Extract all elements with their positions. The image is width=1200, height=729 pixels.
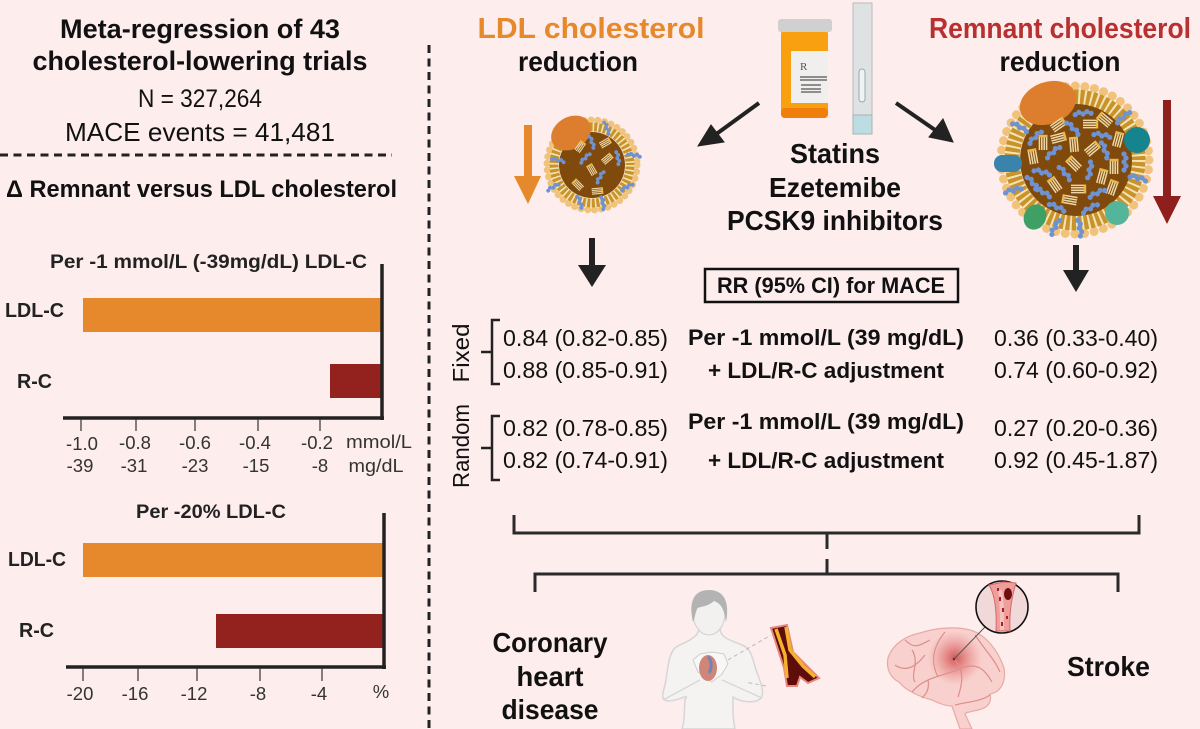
arrowhead: LDL decrease [514,176,541,204]
results: random: Per -1 mmol/L (39 mg/dL) [688,409,964,434]
results: fixed: 0.84 (0.82-0.85) [503,325,668,351]
chart: per -1 mmol/L [5,251,412,476]
title: meta-regression: MACE events = 41,481 [65,117,335,147]
label: coronary heart disease: heart [516,661,584,692]
chart: per -1 mmol/L: -0.2 [301,432,333,453]
title: meta-regression: cholesterol-lowering trials [32,46,368,76]
chart: per -1 mmol/L: -0.6 [179,432,211,453]
arrow: to LDL [698,103,759,146]
arrow: LDL down [578,238,606,287]
chart: per -1 mmol/L: -0.4 [239,432,271,453]
chart: per -1 mmol/L: mg/dL [348,455,404,476]
chart: per -1 mmol/L: LDL-C [5,300,64,322]
chart: per -20%: Per -20% LDL-C [136,501,286,523]
title: meta-regression: N = 327,264 [138,85,262,113]
label: coronary heart disease: Coronary [492,627,608,658]
heading: remnant cholesterol reduction: reduction [1000,46,1120,77]
chart: per -20% [8,501,389,704]
chart: per -20%: -4 [311,683,327,704]
icon: injector pen [853,3,872,134]
chart: per -20%: R-C [19,620,54,642]
icon: brain [887,628,1004,729]
icon: vessel inset [954,581,1028,659]
results: random: 0.82 (0.78-0.85) [503,415,668,441]
title: meta-regression [32,14,368,147]
chart: per -20%: -20 [67,683,93,704]
text: drug list: PCSK9 inhibitors [727,205,943,236]
results: random: 0.82 (0.74-0.91) [503,447,668,473]
heading: LDL cholesterol reduction [478,13,704,77]
chart: per -20%: -12 [181,683,207,704]
chart: per -1 mmol/L: R-C [17,371,52,393]
arrowhead: remnant decrease [1153,196,1181,224]
chart: per -1 mmol/L: -39 [67,455,93,476]
chart: per -20%: -16 [122,683,148,704]
heading: remnant cholesterol reduction [929,13,1191,77]
results: random: 0.27 (0.20-0.36) [994,415,1158,441]
icon: pill bottle: R [800,61,808,73]
results: fixed [448,320,1158,384]
chart: per -1 mmol/L: Per -1 mmol/L (-39mg/dL) LDL-C [50,251,367,273]
chart: per -1 mmol/L: -0.8 [119,432,151,453]
arrow: remnant decrease [1163,100,1171,198]
chart: per -20%: -8 [250,683,266,704]
icon: LDL particle [545,109,642,211]
chart: per -1 mmol/L: -31 [121,455,147,476]
results: fixed: 0.36 (0.33-0.40) [994,325,1158,351]
results: random [448,404,1158,488]
text: drug list: Ezetemibe [769,172,901,203]
text: drug list: Statins [790,138,880,169]
chart: per -1 mmol/L: -8 [312,455,328,476]
results: random: 0.92 (0.45-1.87) [994,447,1158,473]
title: meta-regression: Meta-regression of 43 [60,14,340,44]
results: random: + LDL/R-C adjustment [708,448,945,473]
icon: remnant particle [994,73,1150,239]
label: coronary heart disease: disease [502,694,598,725]
label: stroke: Stroke [1067,651,1150,682]
results: random: Random [448,404,474,488]
chart: per -1 mmol/L: -1.0 [66,433,98,454]
heading: LDL cholesterol reduction: LDL cholesterol [478,13,704,45]
heading: LDL cholesterol reduction: reduction [518,46,638,77]
results: fixed: 0.74 (0.60-0.92) [994,357,1158,383]
label box: RR for MACE [705,269,958,302]
chart: per -1 mmol/L: mmol/L [346,431,412,452]
arrow: remnant down [1063,245,1089,292]
chart: per -1 mmol/L: -15 [243,455,269,476]
icon: pill bottle [778,19,832,118]
text: drug list [727,138,943,236]
label box: RR for MACE: RR (95% CI) for MACE [717,273,945,298]
chart: per -20%: % [373,681,389,702]
results: fixed: Fixed [448,324,474,382]
icon: person with heart [663,590,771,729]
bracket: outcomes [514,515,1139,592]
chart: per -20%: LDL-C [8,549,66,571]
arrow: LDL decrease [524,125,532,178]
label: coronary heart disease [492,627,608,725]
results: fixed: + LDL/R-C adjustment [708,358,945,383]
icon: blocked artery [771,625,819,686]
heading: delta remnant versus LDL: Δ Remnant versus LDL cholesterol [6,176,397,203]
results: fixed: 0.88 (0.85-0.91) [503,357,668,383]
results: fixed: Per -1 mmol/L (39 mg/dL) [688,325,964,350]
arrow: to remnant [896,103,953,142]
chart: per -1 mmol/L: -23 [182,455,208,476]
